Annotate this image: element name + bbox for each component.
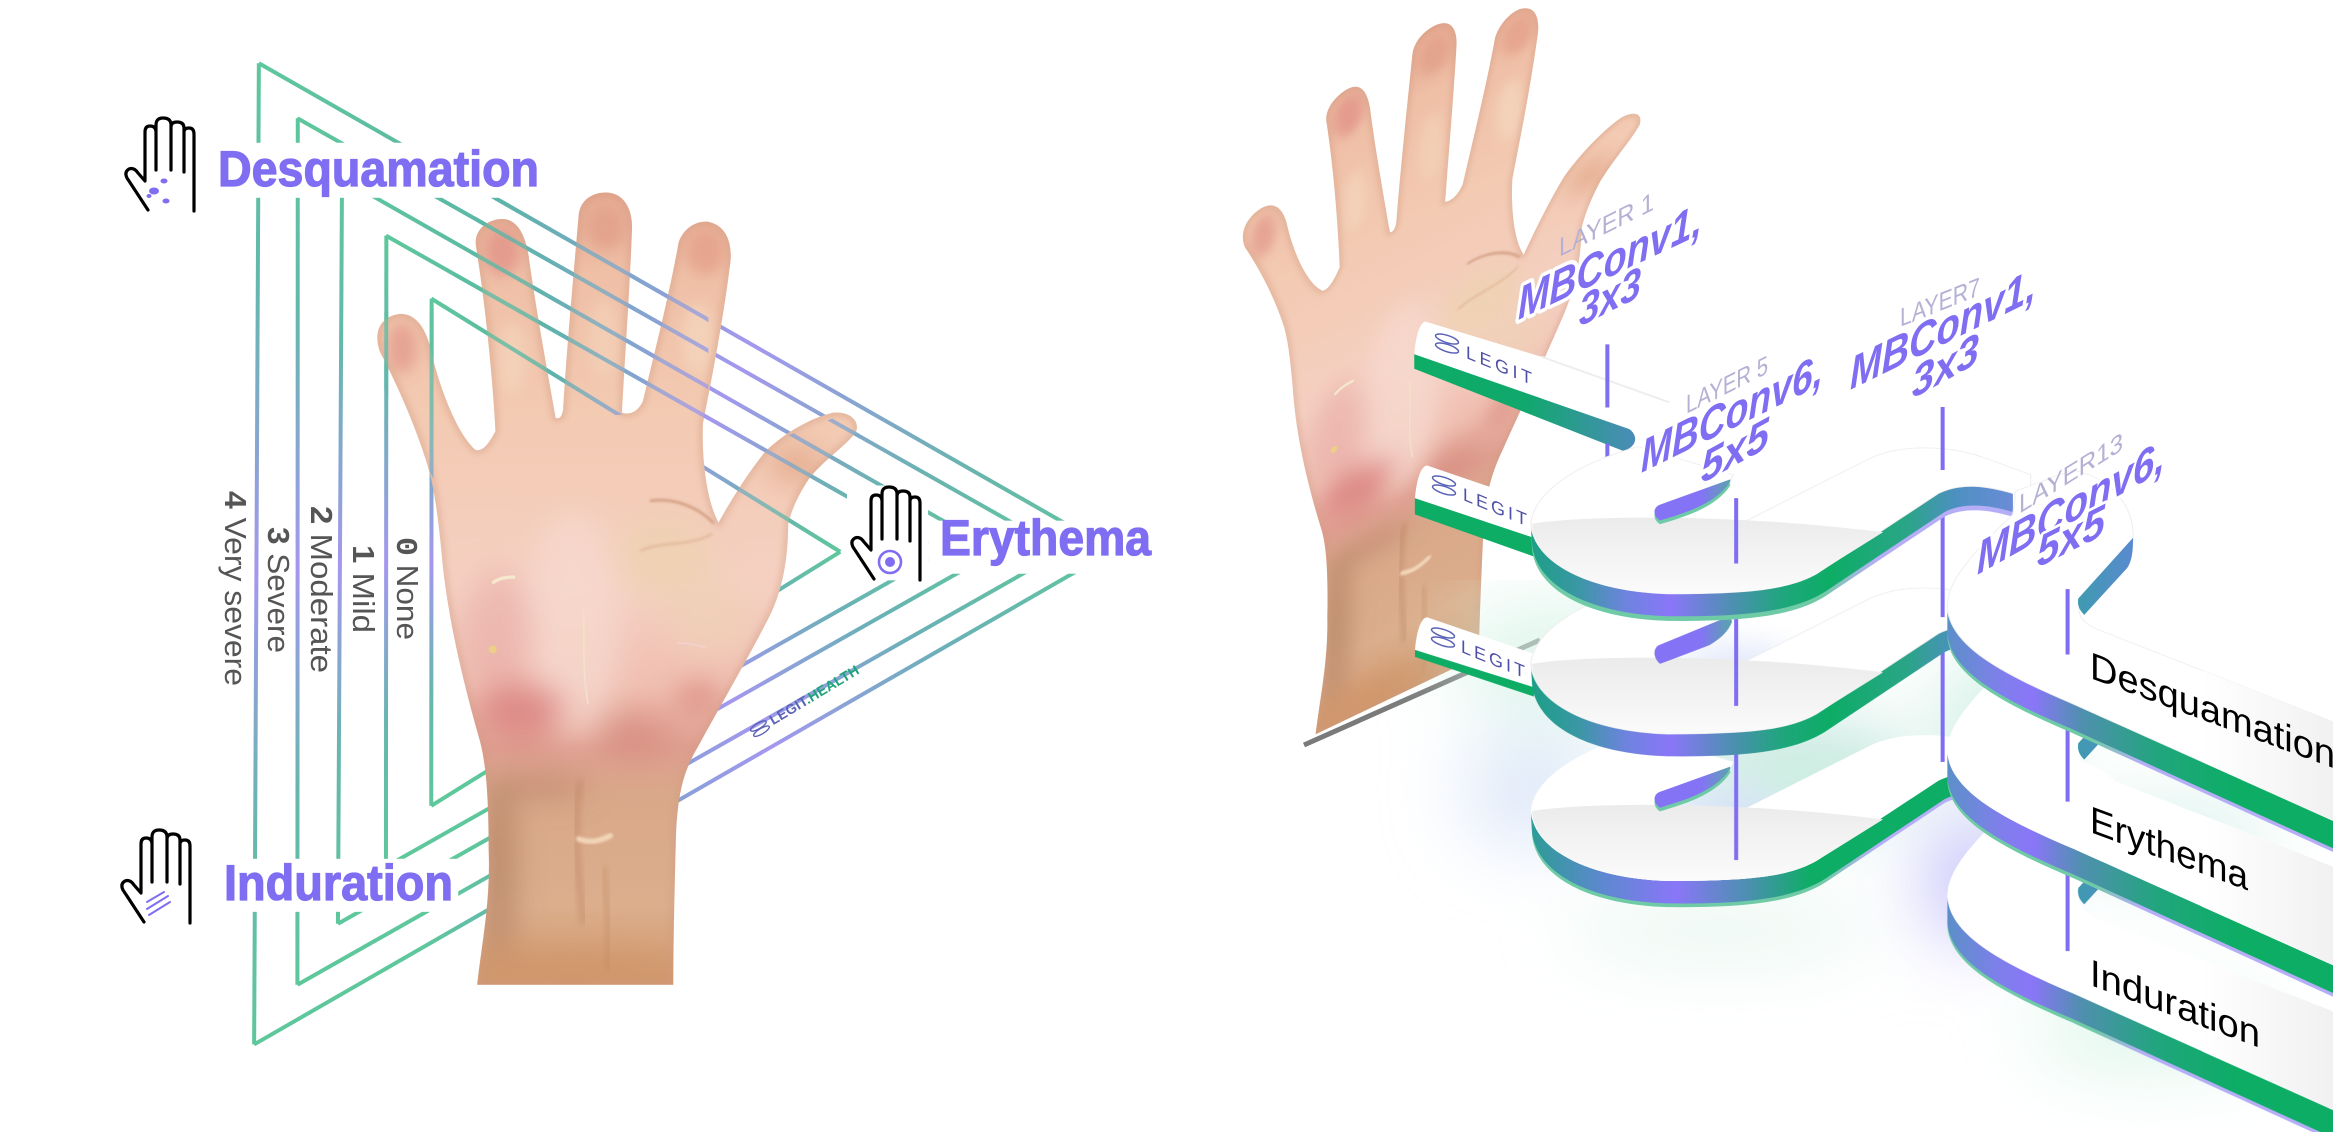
LEGIT logo on strip 3 [1430, 626, 1526, 682]
heading: Desquamation: Desquamation [218, 141, 539, 197]
heading: Induration: Induration [224, 855, 453, 911]
layer label: LAYER 5 MBConv6, 5x5: MBConv6, [1641, 343, 1823, 483]
output label: Induration: Induration [2090, 951, 2260, 1057]
output label: Erythema: Erythema [2090, 798, 2248, 899]
icon: hand with redness target [852, 487, 920, 580]
top ribbon plate [1531, 447, 2031, 621]
skewed hand photo input [1232, 0, 1644, 777]
input strip 3: LEGIT [1415, 617, 1543, 697]
scale: 0 None: 0 None [387, 537, 425, 640]
layer label: LAYER7 MBConv1, 3x3: MBConv1, [1850, 258, 2036, 400]
severity scale labels [218, 491, 425, 686]
layer label: LAYER 5 MBConv6, 5x5: 5x5 [1701, 407, 1770, 494]
scale: 2 Moderate: 2 Moderate [304, 506, 339, 673]
heading: Erythema: Erythema [940, 510, 1152, 566]
middle connection poles [1736, 507, 2068, 802]
lower connection poles [1736, 643, 2068, 951]
layer label: LAYER7 MBConv1, 3x3 [1850, 258, 2036, 409]
layer label: LAYER 1 MBConv1, 3x3: MBConv1, [1518, 193, 1702, 330]
output label: Desquamation: Desquamation [2090, 644, 2333, 777]
icon: hand with thickened skin hatch [122, 830, 190, 923]
layer label: LAYER7 MBConv1, 3x3: LAYER7 [1900, 272, 1980, 333]
stacked layer ribbons [1414, 322, 2333, 1132]
LEGIT logo on strip 1: LEGIT [1466, 342, 1533, 389]
soft glow under layers [1450, 600, 2270, 1065]
layer label: LAYER 1 MBConv1, 3x3: 3x3 [1579, 256, 1641, 336]
top connection poles [1736, 407, 2068, 655]
LEGIT logo on strip 1 [1434, 332, 1533, 389]
layer label: LAYER7 MBConv1, 3x3: 3x3 [1912, 323, 1979, 409]
output plate: Induration [1947, 760, 2333, 1132]
layer label: LAYER13 MBConv6, 5x5: 5x5 [2037, 494, 2106, 577]
scale: 4 Very severe: 4 Very severe [218, 491, 253, 686]
hand photo with eczema [377, 192, 860, 985]
scale: 3 Severe: 3 Severe [261, 527, 296, 653]
layer label: LAYER13 MBConv6, 5x5: LAYER13 [2019, 427, 2123, 520]
LEGIT logo on strip 2: LEGIT [1463, 484, 1528, 530]
layer label: LAYER 1 MBConv1, 3x3: LAYER 1 [1559, 186, 1654, 263]
icon: hand with scales [126, 118, 194, 211]
bottom ribbon plate [1531, 734, 2031, 907]
panel: severity triangle diagram [114, 63, 1155, 1044]
nested severity triangles [114, 63, 1155, 1044]
output plate: Desquamation [1947, 470, 2333, 866]
input strip 1: LEGIT [1414, 322, 1670, 458]
layer label: LAYER 5 MBConv6, 5x5 [1641, 343, 1823, 494]
middle ribbon plate [1531, 587, 2031, 756]
input strip 2: LEGIT [1415, 465, 1543, 556]
LEGIT logo on strip 2 [1431, 474, 1528, 530]
ground edge line [1304, 640, 1540, 745]
output plate: Erythema [1947, 615, 2333, 1011]
layer label: LAYER13 MBConv6, 5x5: MBConv6, [1977, 429, 2165, 585]
panel: network architecture diagram [1232, 0, 2333, 1132]
LEGIT logo on strip 3: LEGIT [1461, 636, 1526, 682]
layer label: LAYER 5 MBConv6, 5x5: LAYER 5 [1686, 349, 1768, 420]
logo: LEGIT.HEALTH: LEGIT.HEALTH [766, 661, 864, 728]
scale: 1 Mild: 1 Mild [346, 545, 381, 633]
